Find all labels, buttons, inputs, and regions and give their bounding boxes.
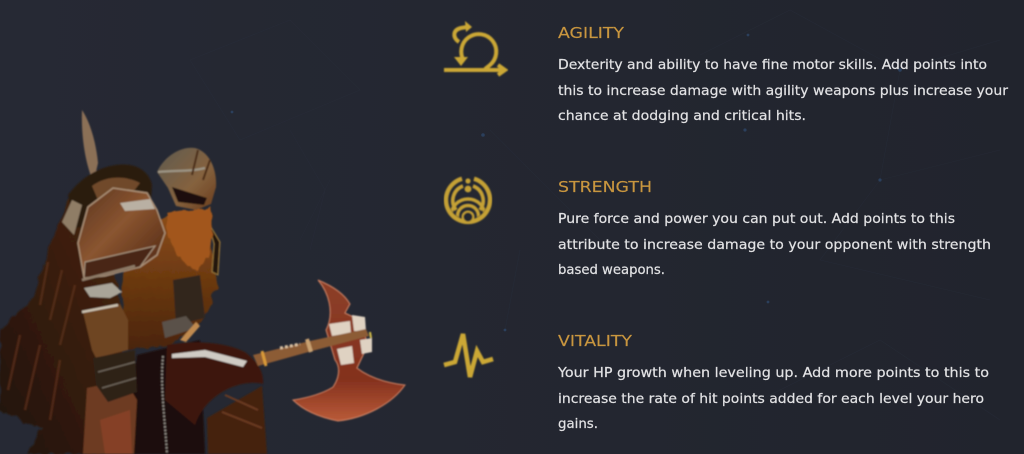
spear tip bbox=[82, 110, 98, 176]
illustration: dwarf warrior with axe bbox=[0, 110, 405, 454]
center harness bbox=[173, 275, 205, 325]
bracer and gauntlet bbox=[83, 304, 128, 358]
back hump bbox=[68, 164, 152, 228]
text: vitality description: increase the rate of hit points added for each level your hero bbox=[558, 391, 984, 407]
text: agility description: this to increase damage with agility weapons plus increase your bbox=[558, 83, 1008, 99]
heading: agility: AGILITY bbox=[558, 24, 625, 42]
icon: agility loop arrow bbox=[444, 21, 505, 75]
text: strength description: Pure force and power you can put out. Add points to this bbox=[558, 211, 955, 227]
text: vitality description: gains. bbox=[558, 416, 598, 432]
heading: strength: STRENGTH bbox=[558, 178, 652, 196]
cape bbox=[0, 195, 125, 454]
thigh bbox=[165, 342, 263, 425]
text: strength description: based weapons. bbox=[558, 262, 665, 278]
belt trim bbox=[172, 350, 247, 367]
shoulder armor bbox=[78, 188, 165, 277]
panel: strength bbox=[446, 178, 991, 278]
right chest armor edge bbox=[208, 222, 220, 275]
axe blade bbox=[293, 280, 405, 421]
icon: strength concentric emblem bbox=[446, 178, 490, 233]
panel: vitality bbox=[444, 332, 989, 432]
text: strength description: attribute to increase damage to your opponent with strength bbox=[558, 237, 991, 253]
axe bbox=[253, 280, 405, 421]
text: agility description: chance at dodging and critical hits. bbox=[558, 108, 806, 124]
cape fur streaks bbox=[8, 262, 75, 420]
text: vitality description bbox=[557, 365, 989, 432]
icon: vitality pulse line bbox=[444, 334, 493, 377]
center dark leg bbox=[125, 340, 205, 454]
text: agility description: Dexterity and ability to have fine motor skills. Add points into bbox=[558, 57, 987, 73]
belt buckle bbox=[162, 316, 196, 338]
axe head plates bbox=[329, 315, 372, 365]
axe handle bbox=[253, 329, 369, 366]
heading: vitality: VITALITY bbox=[558, 332, 633, 350]
lower leg bbox=[207, 386, 267, 454]
panel: agility bbox=[444, 21, 1008, 124]
text: vitality description: Your HP growth when leveling up. Add more points to this to bbox=[557, 365, 989, 381]
beard bbox=[167, 208, 212, 270]
fur mantle and torso bbox=[122, 215, 218, 350]
text: strength description bbox=[558, 211, 991, 278]
helmet bbox=[157, 148, 216, 210]
robe bbox=[83, 380, 137, 454]
text: agility description bbox=[558, 57, 1008, 124]
